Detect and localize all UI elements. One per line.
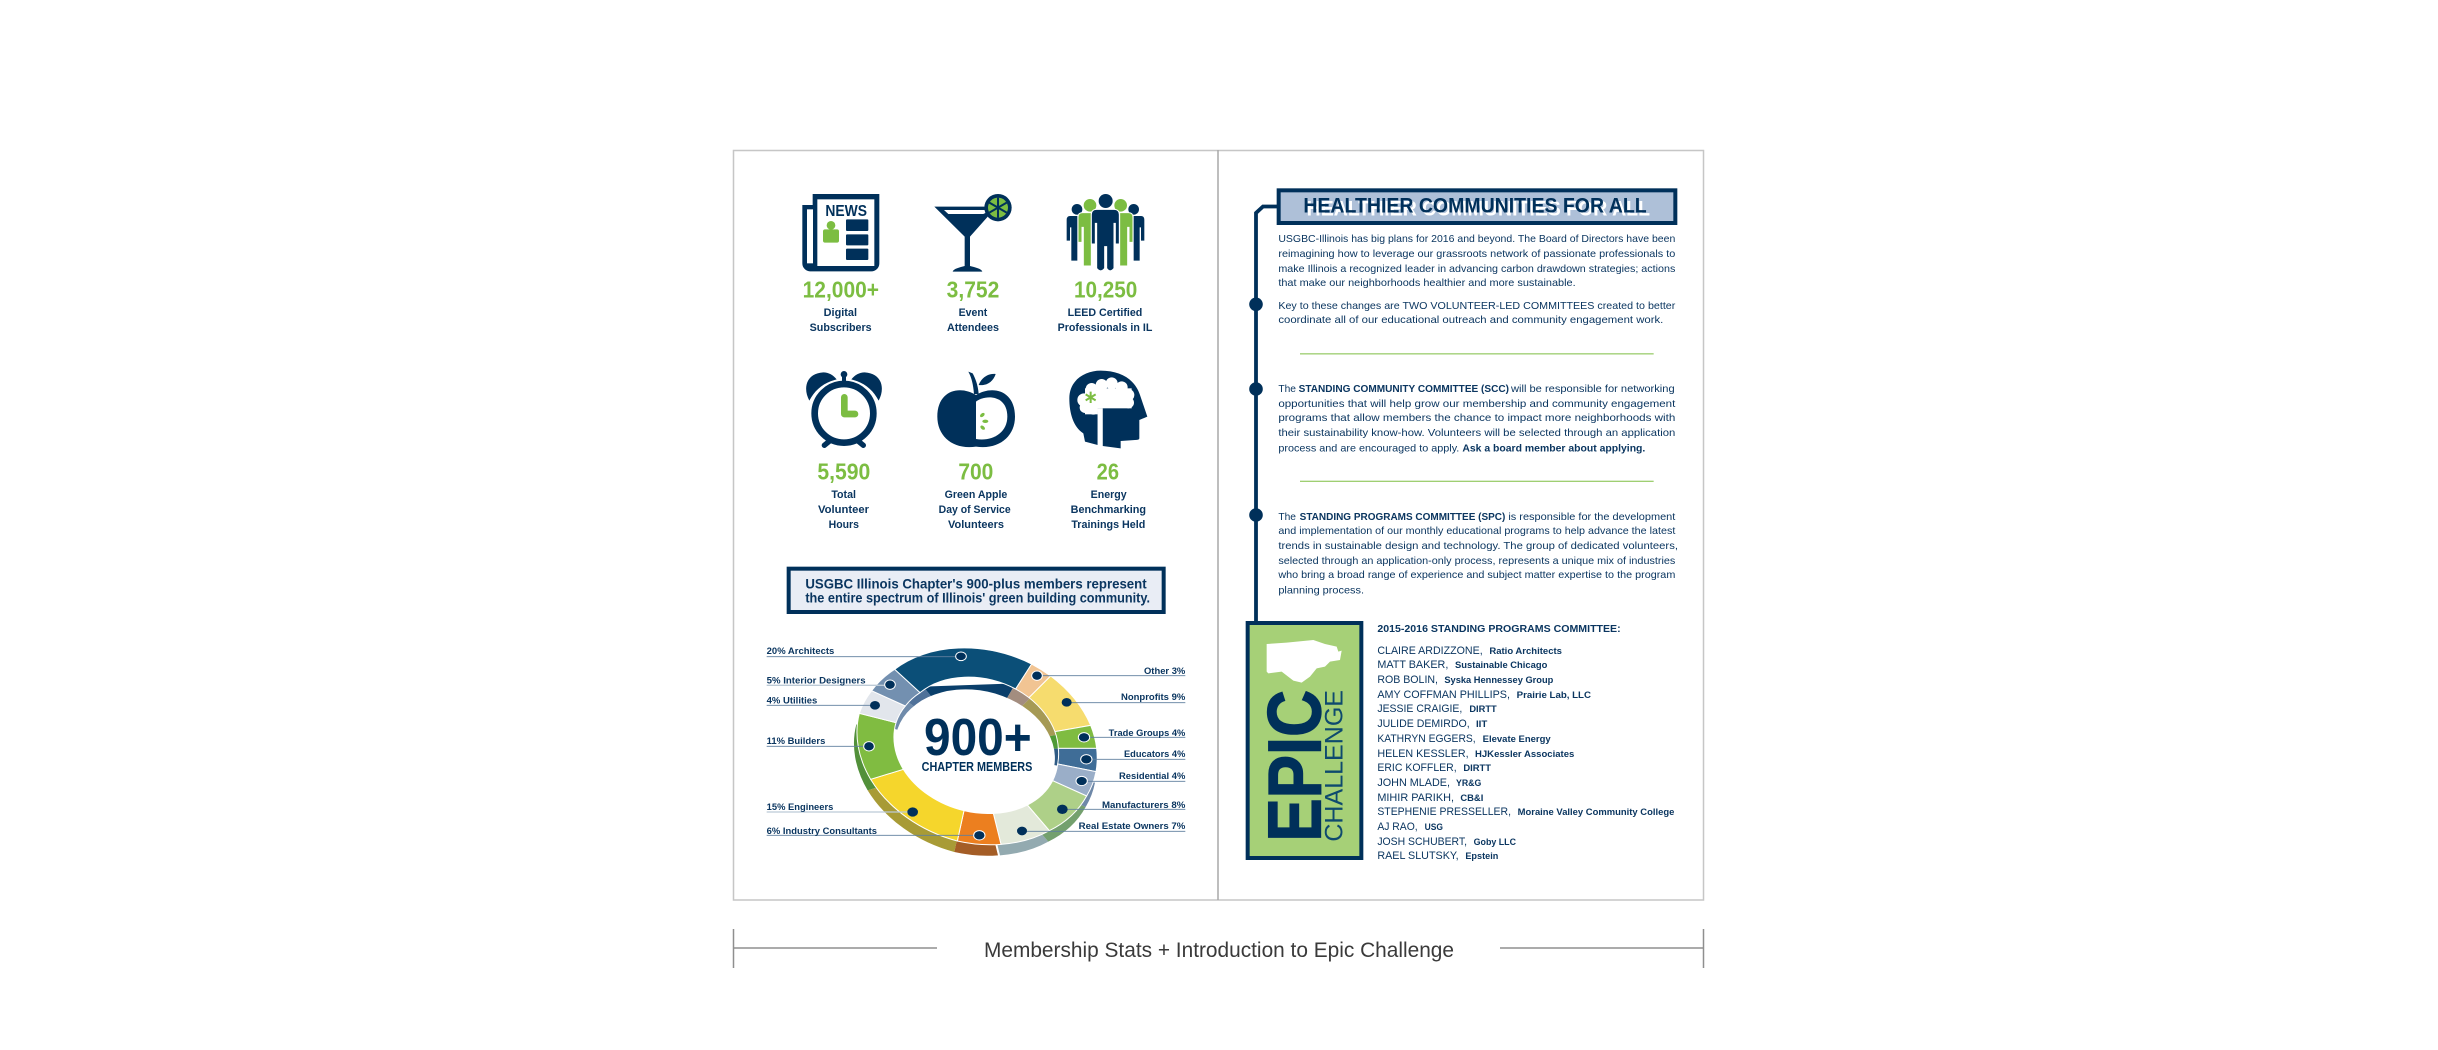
stat: LEED professionals — [1058, 277, 1153, 334]
stat: digital subscribers: Subscribers — [810, 322, 872, 334]
text block: introduction — [1278, 234, 1676, 326]
segment labels: Educators 4% — [1124, 749, 1185, 759]
badge: epic challenge — [1248, 623, 1361, 858]
text block: standing programs committee: trends in sustainable design and technology. The group of dedicated volunteers, — [1278, 541, 1678, 552]
stat grid — [802, 194, 1153, 531]
list: committee members: ROB BOLIN, — [1377, 674, 1438, 686]
text block: standing community committee: their sustainability know-how. Volunteers will be selected through an application — [1278, 428, 1676, 439]
stat: energy benchmarking: Energy — [1091, 489, 1127, 501]
segment labels: 6% Industry Consultants — [767, 826, 877, 836]
icon: martini glass — [934, 194, 1012, 272]
caption: Membership Stats + Introduction to Epic Challenge — [984, 939, 1454, 962]
text block: standing programs committee: is responsible for the development — [1508, 512, 1675, 523]
timeline connector — [1249, 206, 1278, 625]
list: committee members: DIRTT — [1469, 704, 1497, 714]
text block: standing community committee — [1278, 384, 1676, 454]
list: committee members: Ratio Architects — [1489, 646, 1562, 656]
stat: event attendees: 3,752 — [947, 277, 999, 303]
heading: committee roster: 2015-2016 STANDING PROGRAMS COMMITTEE: — [1377, 624, 1621, 635]
stat: event attendees: Event — [959, 307, 988, 319]
panel: membership stats — [767, 194, 1185, 856]
list: committee members: MATT BAKER, — [1377, 659, 1448, 671]
stat: volunteer hours: Hours — [829, 519, 859, 531]
stat: volunteer hours: 5,590 — [817, 459, 870, 485]
text block: introduction: that make our neighborhoods healthier and more sustainable. — [1278, 278, 1576, 289]
list: committee members: Moraine Valley Community College — [1518, 807, 1674, 817]
list: committee members: Goby LLC — [1474, 837, 1517, 847]
stat: digital subscribers — [803, 277, 879, 334]
text block: standing programs committee: selected through an application-only process, represents a unique mix of industries — [1278, 556, 1675, 567]
list: committee members: JESSIE CRAIGIE, — [1377, 703, 1462, 715]
segment labels: Other 3% — [1144, 666, 1185, 676]
callout: spectrum of members: USGBC Illinois Chapter's 900-plus members represent — [805, 577, 1147, 592]
text block: standing community committee: Ask a board member about applying. — [1462, 443, 1645, 454]
segment labels: Residential 4% — [1119, 771, 1185, 781]
segment labels: Manufacturers 8% — [1102, 800, 1185, 810]
list: committee members: USG — [1425, 822, 1443, 832]
segment labels: 15% Engineers — [767, 802, 833, 812]
list: committee members: MIHIR PARIKH, — [1377, 792, 1454, 804]
list: committee members: HJKessler Associates — [1475, 749, 1574, 759]
stat: green apple volunteers: Green Apple — [945, 489, 1007, 501]
segment labels: Nonprofits 9% — [1121, 692, 1185, 702]
segment markers — [864, 652, 1092, 840]
text block: standing programs committee: planning process. — [1278, 585, 1364, 596]
segment labels: Trade Groups 4% — [1109, 728, 1185, 738]
stat: event attendees: Attendees — [947, 322, 999, 334]
list: committee members: RAEL SLUTSKY, — [1377, 850, 1459, 862]
segment labels: 4% Utilities — [767, 695, 817, 705]
stat: energy benchmarking: Trainings Held — [1071, 519, 1145, 531]
list: committee members: YR&G — [1456, 778, 1481, 788]
stat: digital subscribers: Digital — [824, 307, 857, 319]
list: committee members: Syska Hennessey Group — [1444, 675, 1554, 685]
stat: energy benchmarking — [1071, 459, 1146, 531]
list: committee members — [1377, 645, 1674, 862]
segment labels — [767, 646, 1185, 836]
stat: volunteer hours: Total — [831, 489, 856, 501]
list: committee members: Epstein — [1465, 851, 1498, 861]
list: committee members: CLAIRE ARDIZZONE, — [1377, 645, 1483, 657]
stat: event attendees — [947, 277, 999, 334]
text block: standing community committee: process and are encouraged to apply. — [1278, 443, 1459, 454]
list: committee members: JOHN MLADE, — [1377, 777, 1450, 789]
text block: standing programs committee: who bring a broad range of experience and subject matter expertise to the program — [1277, 570, 1675, 581]
icon: illinois map — [1267, 640, 1342, 683]
lower text — [1248, 512, 1678, 862]
callout: spectrum of members: the entire spectrum of Illinois' green building community. — [805, 590, 1150, 605]
stat: green apple volunteers: Volunteers — [948, 519, 1004, 531]
list: committee members: DIRTT — [1463, 763, 1492, 773]
stat: green apple volunteers — [939, 459, 1011, 531]
text block: standing programs committee: STANDING PROGRAMS COMMITTEE (SPC) — [1300, 512, 1505, 523]
text block: standing community committee: The — [1278, 384, 1296, 395]
list: committee members: Sustainable Chicago — [1455, 660, 1548, 670]
panel: healthier communities — [1248, 190, 1678, 862]
segment labels: 20% Architects — [767, 646, 834, 656]
icon: newspaper — [802, 194, 879, 271]
list: committee members: ERIC KOFFLER, — [1377, 762, 1457, 774]
stat: energy benchmarking: 26 — [1097, 459, 1119, 485]
text block: standing community committee: will be responsible for networking — [1510, 384, 1675, 395]
stat: green apple volunteers: 700 — [958, 459, 993, 485]
stat: LEED professionals: 10,250 — [1074, 277, 1137, 303]
text block: introduction: coordinate all of our educational outreach and community engagement work. — [1278, 315, 1663, 326]
text block: introduction: Key to these changes are TWO VOLUNTEER-LED COMMITTEES created to better — [1278, 301, 1676, 312]
icon: head with brain — [1069, 371, 1147, 448]
stat: digital subscribers: 12,000+ — [803, 277, 879, 303]
heading: healthier communities for all: HEALTHIER COMMUNITIES FOR ALL — [1303, 195, 1647, 218]
text block: introduction: reimagining how to leverage our grassroots network of passionate professionals to — [1278, 249, 1676, 260]
stat: volunteer hours: Volunteer — [818, 504, 869, 516]
list: committee members: HELEN KESSLER, — [1377, 748, 1469, 760]
text block: standing programs committee: The — [1278, 512, 1296, 523]
donut centre: 900+ chapter members: 900+ — [924, 708, 1032, 766]
text block: introduction: USGBC-Illinois has big plans for 2016 and beyond. The Board of Directors have been — [1278, 234, 1676, 245]
donut centre: 900+ chapter members: CHAPTER MEMBERS — [922, 759, 1032, 774]
segment labels: Real Estate Owners 7% — [1079, 821, 1185, 831]
callout: spectrum of members — [789, 569, 1164, 612]
list: committee members: CB&I — [1460, 793, 1483, 803]
list: committee members: KATHRYN EGGERS, — [1377, 733, 1476, 745]
icon: alarm clock — [806, 371, 882, 445]
text block: standing community committee: STANDING COMMUNITY COMMITTEE (SCC) — [1299, 384, 1509, 395]
list: committee members: IIT — [1476, 719, 1488, 729]
upper text — [1278, 190, 1676, 482]
list: committee members: JULIDE DEMIRDO, — [1377, 718, 1470, 730]
stat: LEED professionals: LEED Certified — [1068, 307, 1142, 319]
heading: healthier communities for all: HEALTHIER COMMUNITIES FOR ALL — [1307, 197, 1650, 220]
list: committee members: STEPHENIE PRESSELLER, — [1377, 806, 1511, 818]
icon: group of people — [1067, 194, 1144, 271]
text block: standing programs committee: and implementation of our monthly educational programs to help advance the latest — [1278, 526, 1675, 537]
heading: healthier communities for all — [1279, 190, 1675, 223]
icon: apple — [937, 372, 1015, 447]
badge: epic challenge: EPIC — [1253, 690, 1337, 842]
stat: green apple volunteers: Day of Service — [939, 504, 1011, 516]
leader lines — [767, 657, 1185, 835]
list: committee members: Prairie Lab, LLC — [1517, 690, 1592, 700]
list: committee members: AJ RAO, — [1377, 821, 1418, 833]
text block: standing community committee: programs that allow members the chance to impact more neighborhoods with — [1278, 413, 1676, 424]
text block: introduction: make Illinois a recognized leader in advancing carbon drawdown strategies; actions — [1278, 264, 1675, 275]
list: committee members: Elevate Energy — [1483, 734, 1551, 744]
donut chart: chapter members — [854, 648, 1097, 856]
stat: volunteer hours — [817, 459, 870, 531]
badge: epic challenge: CHALLENGE — [1321, 690, 1349, 842]
stat: energy benchmarking: Benchmarking — [1071, 504, 1146, 516]
list: committee members: AMY COFFMAN PHILLIPS, — [1377, 689, 1510, 701]
segment labels: 11% Builders — [767, 736, 825, 746]
membership breakdown — [767, 569, 1185, 856]
text block: standing community committee: opportunities that will help grow our membership and community engagement — [1278, 399, 1675, 410]
stat: LEED professionals: Professionals in IL — [1058, 322, 1153, 334]
list: committee members: JOSH SCHUBERT, — [1377, 836, 1467, 848]
icon: newspaper: NEWS — [825, 203, 867, 220]
text block: standing programs committee — [1277, 512, 1678, 596]
segment labels: 5% Interior Designers — [767, 675, 866, 685]
